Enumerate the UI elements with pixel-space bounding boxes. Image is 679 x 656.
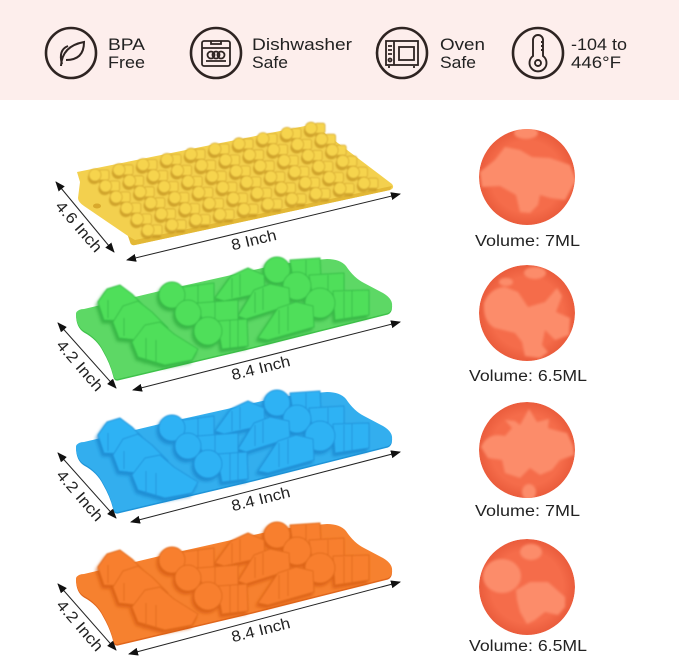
dimension: green tray width: 8.4 Inch [230, 353, 292, 384]
text: Dishwasher Safe [252, 35, 352, 72]
text: Oven Safe: Oven [440, 35, 485, 54]
dimension: blue tray depth [53, 453, 116, 525]
label: volume 6.5ML: Volume: 6.5ML [469, 368, 587, 385]
text: BPA Free: Free [108, 53, 145, 72]
dimension: blue tray width: 8.4 Inch [230, 484, 292, 515]
label: volume 7ML: Volume: 7ML [475, 503, 580, 520]
dimension: yellow tray depth: 4.6 Inch [52, 198, 105, 256]
yellow tray [77, 122, 393, 245]
text: temperature range: -104 to [571, 35, 627, 54]
cavity detail 1: triceratops [479, 127, 576, 225]
text: temperature range: 446°F [571, 53, 621, 72]
label: volume 6.5ML: Volume: 6.5ML [469, 638, 587, 655]
blue tray [76, 390, 392, 514]
dimension: orange tray width: 8.4 Inch [230, 615, 292, 646]
text: Dishwasher Safe: Dishwasher [252, 35, 352, 54]
icon: oven [377, 28, 427, 78]
icon: thermometer [513, 28, 563, 78]
dimension: green tray width [133, 322, 400, 390]
dimension: orange tray width [129, 582, 400, 654]
icon: dishwasher [191, 28, 241, 78]
label: volume 7ML: Volume: 7ML [475, 233, 580, 250]
header band [0, 0, 679, 100]
cavity detail 4: long-neck dinosaur [479, 539, 575, 635]
dimension: yellow tray depth [52, 182, 114, 256]
text: temperature range [571, 35, 627, 72]
text: Oven Safe [440, 35, 485, 72]
dimension: blue tray width [131, 452, 400, 522]
orange tray [76, 522, 392, 646]
green tray [76, 257, 392, 381]
dimension: green tray depth [53, 323, 116, 395]
text: BPA Free: BPA [108, 35, 146, 54]
cavity detail 2: spiky dinosaur [479, 265, 575, 361]
dimension: yellow tray width: 8 Inch [230, 227, 278, 254]
dimension: yellow tray width [127, 194, 400, 260]
dimension: orange tray depth [53, 584, 116, 655]
dimension: orange tray depth: 4.2 Inch [53, 597, 106, 655]
text: Oven Safe: Safe [440, 53, 476, 72]
dimension: blue tray depth: 4.2 Inch [53, 467, 106, 525]
dimension: green tray depth: 4.2 Inch [53, 337, 106, 395]
text: BPA Free [108, 35, 146, 72]
cavity detail 3: stegosaurus [479, 402, 575, 500]
text: Dishwasher Safe: Safe [252, 53, 288, 72]
icon: BPA free leaf [46, 28, 96, 78]
